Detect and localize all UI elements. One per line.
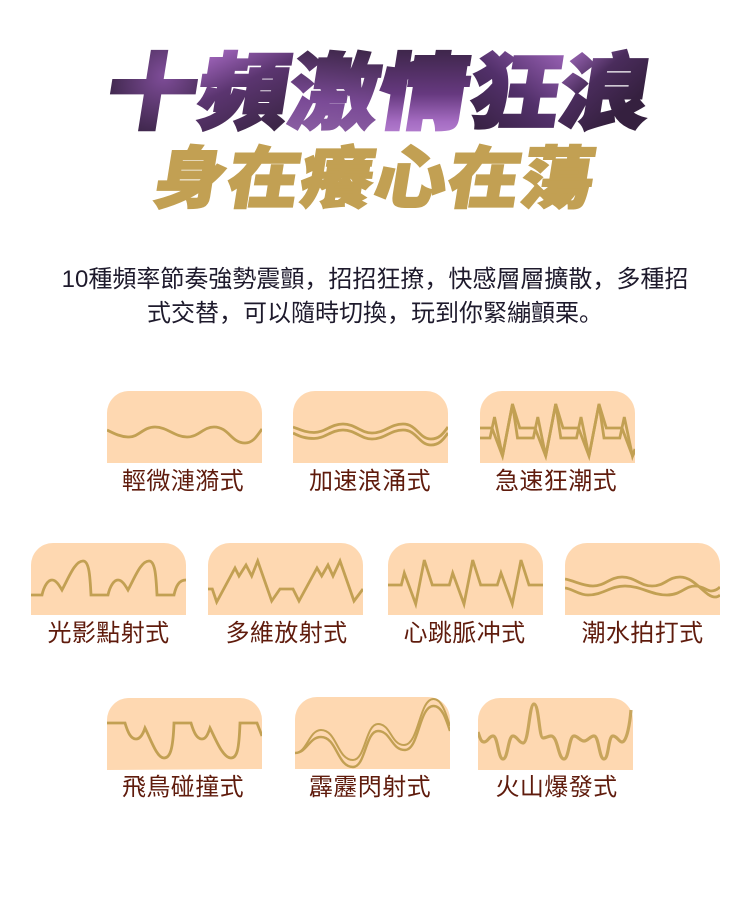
mode card: 光影點射式 — [31, 543, 186, 647]
mode card: 加速浪涌式: 加速浪涌式 — [309, 468, 431, 495]
mode card: 急速狂潮式 — [480, 391, 635, 495]
mode card: 多維放射式 — [208, 543, 363, 647]
title line one: 頻 — [191, 48, 296, 140]
title line one: 浪 — [553, 48, 658, 140]
intro text — [62, 266, 688, 327]
title line one: 情 — [372, 48, 477, 140]
mode card: 潮水拍打式: 潮水拍打式 — [582, 620, 704, 647]
intro text: 10種頻率節奏強勢震顫，招招狂撩，快感層層擴散，多種招 — [62, 266, 688, 293]
mode card: 火山爆發式 — [478, 698, 633, 801]
title line two: 身在癢心在蕩 — [149, 142, 600, 216]
mode card: 輕微漣漪式: 輕微漣漪式 — [122, 468, 244, 495]
mode card: 飛鳥碰撞式 — [107, 698, 262, 801]
title line one — [100, 48, 658, 140]
mode card: 多維放射式: 多維放射式 — [226, 620, 348, 647]
mode card: 飛鳥碰撞式: 飛鳥碰撞式 — [122, 774, 244, 801]
mode card: 心跳脈冲式 — [388, 543, 543, 647]
title line one: 激 — [282, 48, 387, 140]
title line one: 十 — [100, 48, 205, 140]
mode card: 潮水拍打式 — [565, 543, 720, 647]
title — [100, 48, 658, 216]
mode card: 火山爆發式: 火山爆發式 — [496, 774, 618, 801]
mode card: 心跳脈冲式: 心跳脈冲式 — [404, 620, 526, 647]
mode card: 急速狂潮式: 急速狂潮式 — [495, 468, 617, 495]
mode card: 加速浪涌式 — [293, 391, 448, 495]
intro text: 式交替，可以隨時切換，玩到你緊繃顫栗。 — [147, 300, 603, 327]
mode card: 輕微漣漪式 — [107, 391, 262, 495]
mode card: 霹靂閃射式: 霹靂閃射式 — [309, 774, 431, 801]
mode card: 光影點射式: 光影點射式 — [48, 620, 170, 647]
title line one: 狂 — [463, 48, 568, 140]
mode card: 霹靂閃射式 — [295, 697, 450, 801]
